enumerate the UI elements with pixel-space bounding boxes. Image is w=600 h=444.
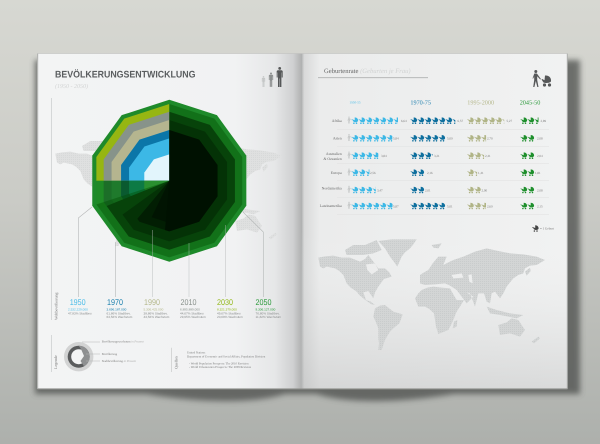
icon legend: 1 Geburt: = 1 Geburt (540, 226, 554, 230)
sources: - World Urbanization Prospects: The 2009 Revision (189, 365, 252, 369)
row: Asien: 2,08 (537, 136, 543, 140)
row: Europa: 1,81 (535, 171, 541, 175)
data: 2050 (256, 297, 282, 319)
data: 2030: 20,68% Wachstum (217, 315, 243, 319)
data: 1970: 1970 (107, 297, 123, 307)
data: 2030: 2030 (217, 297, 233, 307)
icon: people (262, 67, 283, 87)
row: Afrika: Afrika (332, 119, 342, 123)
row: Lateinamerika: 2,15 (537, 204, 543, 208)
outer rim: 2050 (92, 100, 246, 262)
row: Afrika: 6,57 (458, 119, 463, 123)
data: 1970: 3.696.187.000 (106, 308, 127, 312)
data: 1950 (68, 297, 92, 316)
upper-left quadrant rings (96, 104, 170, 181)
row: Asien (333, 129, 549, 142)
row: Asien: 5,84 (393, 136, 399, 140)
row: Afrika: 2,89 (540, 119, 546, 123)
row: Afrika (332, 116, 546, 124)
panel: left page (37, 53, 301, 390)
row: Europa: 2,16 (427, 171, 433, 175)
legend (52, 335, 144, 372)
overlapping dark sectors (96, 104, 242, 257)
data: 1970 (106, 297, 133, 319)
world map, right page (318, 239, 545, 350)
data: 2010 (180, 297, 206, 319)
data: 2010: 6.895.889.000 (180, 308, 200, 312)
sources: Department of Economic and Social Affairs, Population Division (187, 354, 266, 358)
heading: Geburtenrate: Geburtenrate (Geburten je Frau) (324, 68, 411, 75)
row: Europa (331, 163, 549, 176)
data: 1990 (144, 297, 170, 319)
row: Afrika: 6,64 (401, 119, 407, 123)
row: Lateinamerika: 2,69 (487, 204, 493, 208)
row: Nordamerika: 2,01 (425, 188, 431, 192)
table column headers: 1995-2000 (467, 99, 494, 106)
lower-left band (96, 180, 169, 206)
row: Nordamerika: Nordamerika (322, 186, 342, 190)
row: Australien & Ozeanien: 3,84 (381, 154, 387, 158)
sources: - World Population Prospects: The 2010 Revision (189, 362, 249, 366)
row: Lateinamerika: 5,87 (393, 204, 399, 208)
title: BEVÖLKERUNGSENTWICKLUNG (55, 68, 196, 80)
legend icon: ring (64, 342, 93, 371)
row: Afrika: 5,27 (506, 119, 512, 123)
legend: Legende (53, 355, 58, 369)
data: 1990: 5.306.425.000 (144, 308, 164, 312)
legend: Bevölkerung (102, 352, 118, 356)
table column headers (350, 99, 540, 106)
legend: Bevölkerungswachstum in Prozent (102, 340, 144, 344)
sources: United Nations (187, 350, 206, 354)
row: Australien & Ozeanien: 2,41 (485, 154, 491, 158)
row: Australien & Ozeanien: Australien (326, 152, 342, 156)
table column headers: 2045-50 (520, 99, 540, 106)
row: Europa: 2,56 (370, 171, 376, 175)
data: 1990: 1990 (144, 297, 160, 307)
legend: Stadtbevölkerung in Prozent (102, 359, 136, 363)
panel: right page (301, 53, 568, 390)
row: Nordamerika: 2,08 (537, 188, 543, 192)
leader lines (78, 207, 263, 297)
data: 1990: 38,86% Stadtbev. (144, 312, 168, 316)
data: 1950: 47,83% Stadtbev. (68, 312, 92, 316)
magazine drop shadow (35, 60, 580, 401)
row: Lateinamerika (320, 198, 549, 214)
row: Nordamerika (322, 180, 549, 193)
row: Australien & Ozeanien: 3,21 (434, 154, 440, 158)
data: 2030 (217, 297, 243, 319)
data: 2050: 76,80% Stadtbev. (256, 312, 280, 316)
sources (172, 348, 266, 372)
table column headers: 1950-55 (350, 100, 361, 104)
icon: parent with stroller (532, 70, 551, 87)
icon legend: 1 Geburt (532, 225, 554, 232)
row: Europa: 1,41 (478, 171, 484, 175)
label: Weltbevölkerung: Weltbevölkerung (54, 293, 58, 320)
data: 1970: 61,86% Stadtbev. (106, 312, 131, 316)
sources: Quellen (174, 356, 178, 369)
data: 2010: 44,67% Stadtbev. (180, 312, 204, 316)
data: 2050: 9.306.127.000 (256, 308, 276, 312)
data: 2050: 2050 (256, 297, 272, 307)
row: Lateinamerika: 5,01 (447, 204, 453, 208)
row: Australien & Ozeanien: & Ozeanien (323, 157, 342, 161)
data: 2010: 2010 (180, 297, 197, 307)
row: Australien & Ozeanien (323, 147, 549, 161)
data: 1950: 2.532.229.000 (68, 308, 88, 312)
row: Asien: Asien (333, 136, 342, 140)
data: 2030: 8.321.379.000 (217, 308, 237, 312)
row: Asien: 5,09 (447, 136, 453, 140)
row: Nordamerika: 3,47 (377, 188, 383, 192)
table column headers: 1970-75 (410, 99, 431, 106)
data: 1970: 63,56% Wachstum (106, 315, 133, 319)
data: 2050: 11,82% Wachstum (256, 315, 282, 319)
data: 1950: 1950 (70, 297, 86, 307)
data: 1990: 43,56% Wachstum (144, 315, 170, 319)
heading: Geburtenrate (318, 68, 428, 78)
row: Australien & Ozeanien: 2,04 (537, 154, 543, 158)
row: Lateinamerika: Lateinamerika (320, 204, 342, 208)
decagon population chart (92, 100, 246, 262)
row: Europa: Europa (331, 171, 342, 175)
row: Asien: 2,70 (487, 136, 493, 140)
data: 2030: 49,67% Stadtbev. (217, 312, 241, 316)
row: Nordamerika: 2,00 (482, 188, 487, 192)
subtitle: years: (1950 - 2050) (55, 83, 88, 90)
world map behind chart (55, 135, 282, 246)
data: 2010: 29,95% Wachstum (180, 315, 206, 319)
axis line: Weltbevölkerung (50, 98, 52, 320)
